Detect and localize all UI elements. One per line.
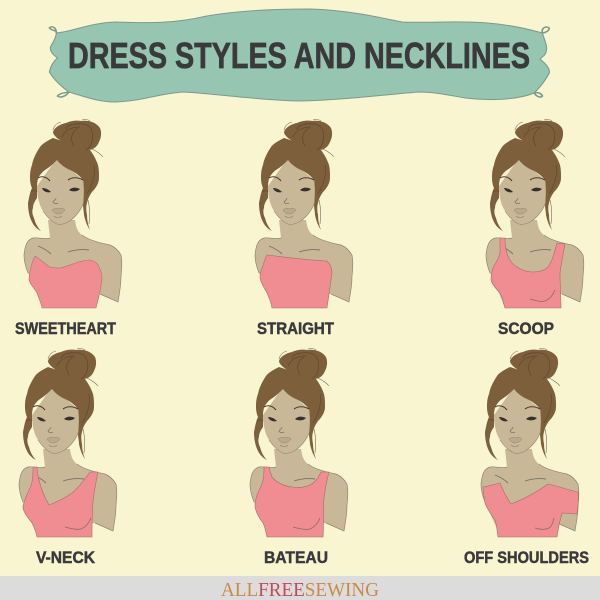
- dress: straight: [260, 255, 332, 308]
- label: sweetheart: SWEETHEART: [15, 319, 117, 338]
- figure: bateau: [250, 348, 348, 567]
- label: scoop: SCOOP: [498, 319, 554, 338]
- figure: scoop: [486, 119, 584, 338]
- bust line: [293, 518, 320, 529]
- dress: off shoulders: [483, 483, 578, 537]
- banner: [49, 9, 549, 102]
- bust line: [535, 518, 554, 530]
- figure: v-neck: [19, 348, 117, 567]
- bust line: [530, 290, 555, 301]
- dress: bateau: [255, 467, 329, 537]
- label: v-neck: V-NECK: [36, 548, 96, 567]
- footer bar: [0, 576, 600, 600]
- dress: sweetheart: [29, 256, 102, 308]
- label: straight: STRAIGHT: [257, 319, 335, 338]
- figure: off shoulders: [464, 348, 589, 567]
- label: bateau: BATEAU: [264, 548, 328, 567]
- dress: v-neck: [23, 467, 98, 537]
- figure: sweetheart: [15, 119, 122, 338]
- dress: scoop: [491, 238, 565, 308]
- figure: straight: [255, 119, 353, 338]
- bust line: [65, 518, 91, 529]
